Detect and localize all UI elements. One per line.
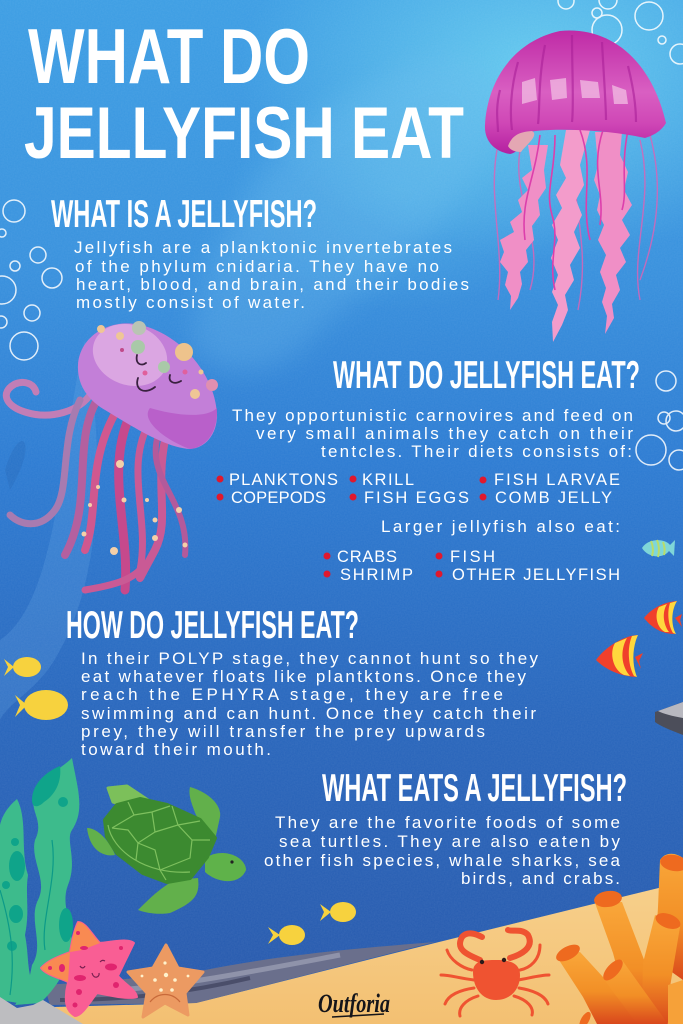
rocks bottom left: [0, 997, 83, 1024]
title: JELLYFISH EAT: [24, 93, 464, 174]
section: how do jellyfish eat: reach the EPHYRA stage, they are free: [81, 685, 503, 704]
illustration: magenta jellyfish: [485, 31, 666, 342]
section: what is a jellyfish: Jellyfish are a planktonic invertebrates: [74, 238, 452, 257]
tentacle right: [594, 132, 632, 334]
section: how do jellyfish eat: swimming and can hunt. Once they catch their: [81, 704, 536, 723]
section: how do jellyfish eat: prey, they will transfer the prey upwards: [81, 722, 485, 741]
section: what is a jellyfish: [51, 193, 469, 312]
tube: lower left: [557, 952, 640, 1024]
larger jellyfish list: CRABS: [337, 548, 397, 566]
larger jellyfish list: OTHER JELLYFISH: [452, 566, 620, 584]
title: [24, 12, 464, 174]
tube: upper: [595, 902, 668, 1024]
sea floor: sand and rock: [44, 882, 683, 1024]
section: how do jellyfish eat: HOW DO JELLYFISH EAT?: [66, 604, 359, 647]
diet list: [216, 471, 620, 507]
seaweed: [0, 758, 79, 1005]
section: what eats a jellyfish: They are the favorite foods of some: [275, 813, 620, 832]
section: what do jellyfish eat: They opportunistic carnovires and feed on: [232, 406, 633, 425]
tube: lower centre: [603, 960, 668, 1024]
section: what is a jellyfish: WHAT IS A JELLYFISH?: [51, 193, 317, 236]
section: how do jellyfish eat: eat whatever floats like plantktons. Once they: [81, 667, 526, 686]
section: what do jellyfish eat: tentcles. Their diets consists of:: [321, 442, 632, 461]
larger jellyfish list: [324, 548, 620, 584]
diet list: COPEPODS: [231, 489, 326, 507]
tube: right middle: [642, 915, 680, 1024]
section: what is a jellyfish: heart, blood, and brain, and their bodies: [76, 275, 469, 294]
icon: yellow fish left top: [4, 657, 41, 677]
section: how do jellyfish eat: [66, 604, 538, 759]
diet list: KRILL: [362, 471, 414, 489]
section: what do jellyfish eat: very small animals they catch on their: [256, 424, 633, 443]
icon: orange starfish: [128, 945, 203, 1017]
larger jellyfish list: FISH: [450, 548, 495, 566]
section: what do jellyfish eat: [216, 354, 640, 584]
icon: turtle: [87, 786, 246, 914]
logo: Outforia: Outforia: [318, 989, 390, 1018]
section: what do jellyfish eat: Larger jellyfish also eat:: [381, 517, 620, 536]
section: what is a jellyfish: of the phylum cnidaria. They have no: [75, 257, 439, 276]
icon: yellow fish bottom left: [268, 925, 305, 945]
icon: yellow fish left bottom: [15, 690, 68, 720]
section: what eats a jellyfish: birds, and crabs.: [461, 869, 620, 888]
title: WHAT DO: [28, 12, 310, 100]
bell: [485, 31, 666, 154]
icon: orange coral: [553, 853, 683, 1024]
rock at right edge: [655, 702, 683, 735]
hook tentacle: [6, 382, 92, 415]
tentacle centre: [551, 130, 590, 342]
tube: bottom right: [668, 980, 683, 1024]
diet list: PLANKTONS: [229, 471, 338, 489]
section: how do jellyfish eat: toward their mouth.: [81, 740, 271, 759]
section: what eats a jellyfish: [264, 767, 627, 888]
icon: pink starfish: [41, 922, 137, 1016]
tube: top right: [655, 854, 683, 980]
diet list: FISH EGGS: [364, 489, 469, 507]
section: what is a jellyfish: mostly consist of water.: [76, 293, 305, 312]
bell: [78, 323, 217, 449]
icon: tropical fish upper: [644, 601, 682, 634]
icon: small teal fish: [642, 540, 675, 557]
bubbles: [0, 0, 683, 470]
section: what eats a jellyfish: other fish species, whale sharks, sea: [264, 851, 621, 870]
section: how do jellyfish eat: In their POLYP stage, they cannot hunt so they: [81, 649, 538, 668]
section: what eats a jellyfish: sea turtles. They are also eaten by: [279, 832, 620, 851]
icon: crab: [441, 930, 549, 1016]
icon: yellow fish bottom right: [320, 902, 356, 922]
diet list: COMB JELLY: [495, 489, 612, 507]
larger jellyfish list: SHRIMP: [340, 566, 413, 584]
illustration: purple jellyfish: [6, 314, 218, 590]
diet list: FISH LARVAE: [494, 471, 620, 489]
icon: tropical fish lower: [596, 635, 643, 677]
tentacle left: [500, 145, 548, 310]
